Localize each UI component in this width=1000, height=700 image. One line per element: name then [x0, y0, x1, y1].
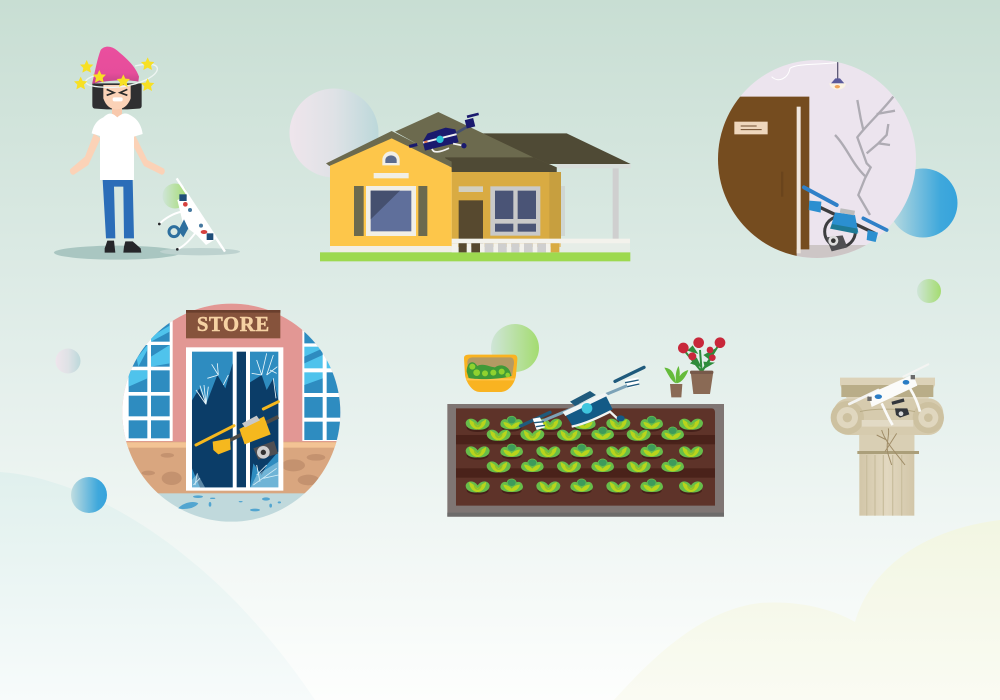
porch [480, 133, 631, 240]
scene: broken store window [120, 302, 346, 525]
white drone [849, 364, 928, 425]
crashed drone [158, 178, 225, 252]
scene: house with drone on roof [320, 112, 631, 261]
wall circle [718, 60, 916, 258]
scene: garden bed with drone [447, 337, 725, 517]
gabled front [326, 131, 452, 252]
right window [302, 330, 340, 441]
yellow drone [196, 402, 278, 460]
scene: dizzy girl and crashed drone [54, 47, 240, 260]
circle: blue behind door scene [888, 168, 958, 238]
drone on roof [405, 113, 486, 161]
wall crack [835, 97, 895, 215]
hill: right [614, 520, 1000, 700]
hat [92, 47, 139, 84]
broken glass holes [192, 363, 233, 487]
scene: door and cracked wall [713, 60, 916, 262]
cracked shards [192, 462, 278, 487]
capital with volutes [831, 378, 944, 435]
porch railing [452, 239, 630, 252]
left window [120, 318, 173, 441]
scene: ionic column with drone [831, 364, 944, 516]
circle: pale behind house [290, 88, 378, 178]
wire [772, 63, 837, 80]
store door with broken glass [186, 347, 283, 491]
pavement [156, 492, 306, 522]
facade [120, 302, 343, 443]
column cracks [877, 428, 905, 465]
lawn [320, 252, 630, 261]
stars and orbit [74, 57, 157, 91]
lettuce rows [466, 416, 703, 495]
brick base [120, 442, 343, 493]
drone at door [804, 187, 887, 251]
circle: small green [917, 279, 941, 303]
circle: green behind basket [491, 324, 539, 372]
side wing wall [452, 172, 561, 247]
circle: small pale [56, 348, 80, 374]
backdrop circle [122, 304, 340, 522]
girl [70, 47, 165, 253]
hanging lamp [829, 60, 846, 90]
store sign: STORE [197, 314, 270, 336]
circle: blue lower left [71, 477, 107, 513]
store sign [186, 310, 280, 338]
circle: green behind drone [162, 184, 188, 208]
hill: left [0, 472, 315, 700]
ground shadows [54, 246, 240, 260]
floor [794, 245, 866, 258]
potted plant [664, 366, 688, 397]
potted roses [678, 337, 725, 394]
basket of greens [464, 355, 517, 392]
glass debris on pavement [178, 495, 281, 511]
door [713, 97, 809, 258]
column shaft [857, 435, 919, 516]
main roof [395, 112, 557, 172]
raised garden bed [447, 404, 724, 517]
crashed drone on bed [521, 367, 644, 430]
